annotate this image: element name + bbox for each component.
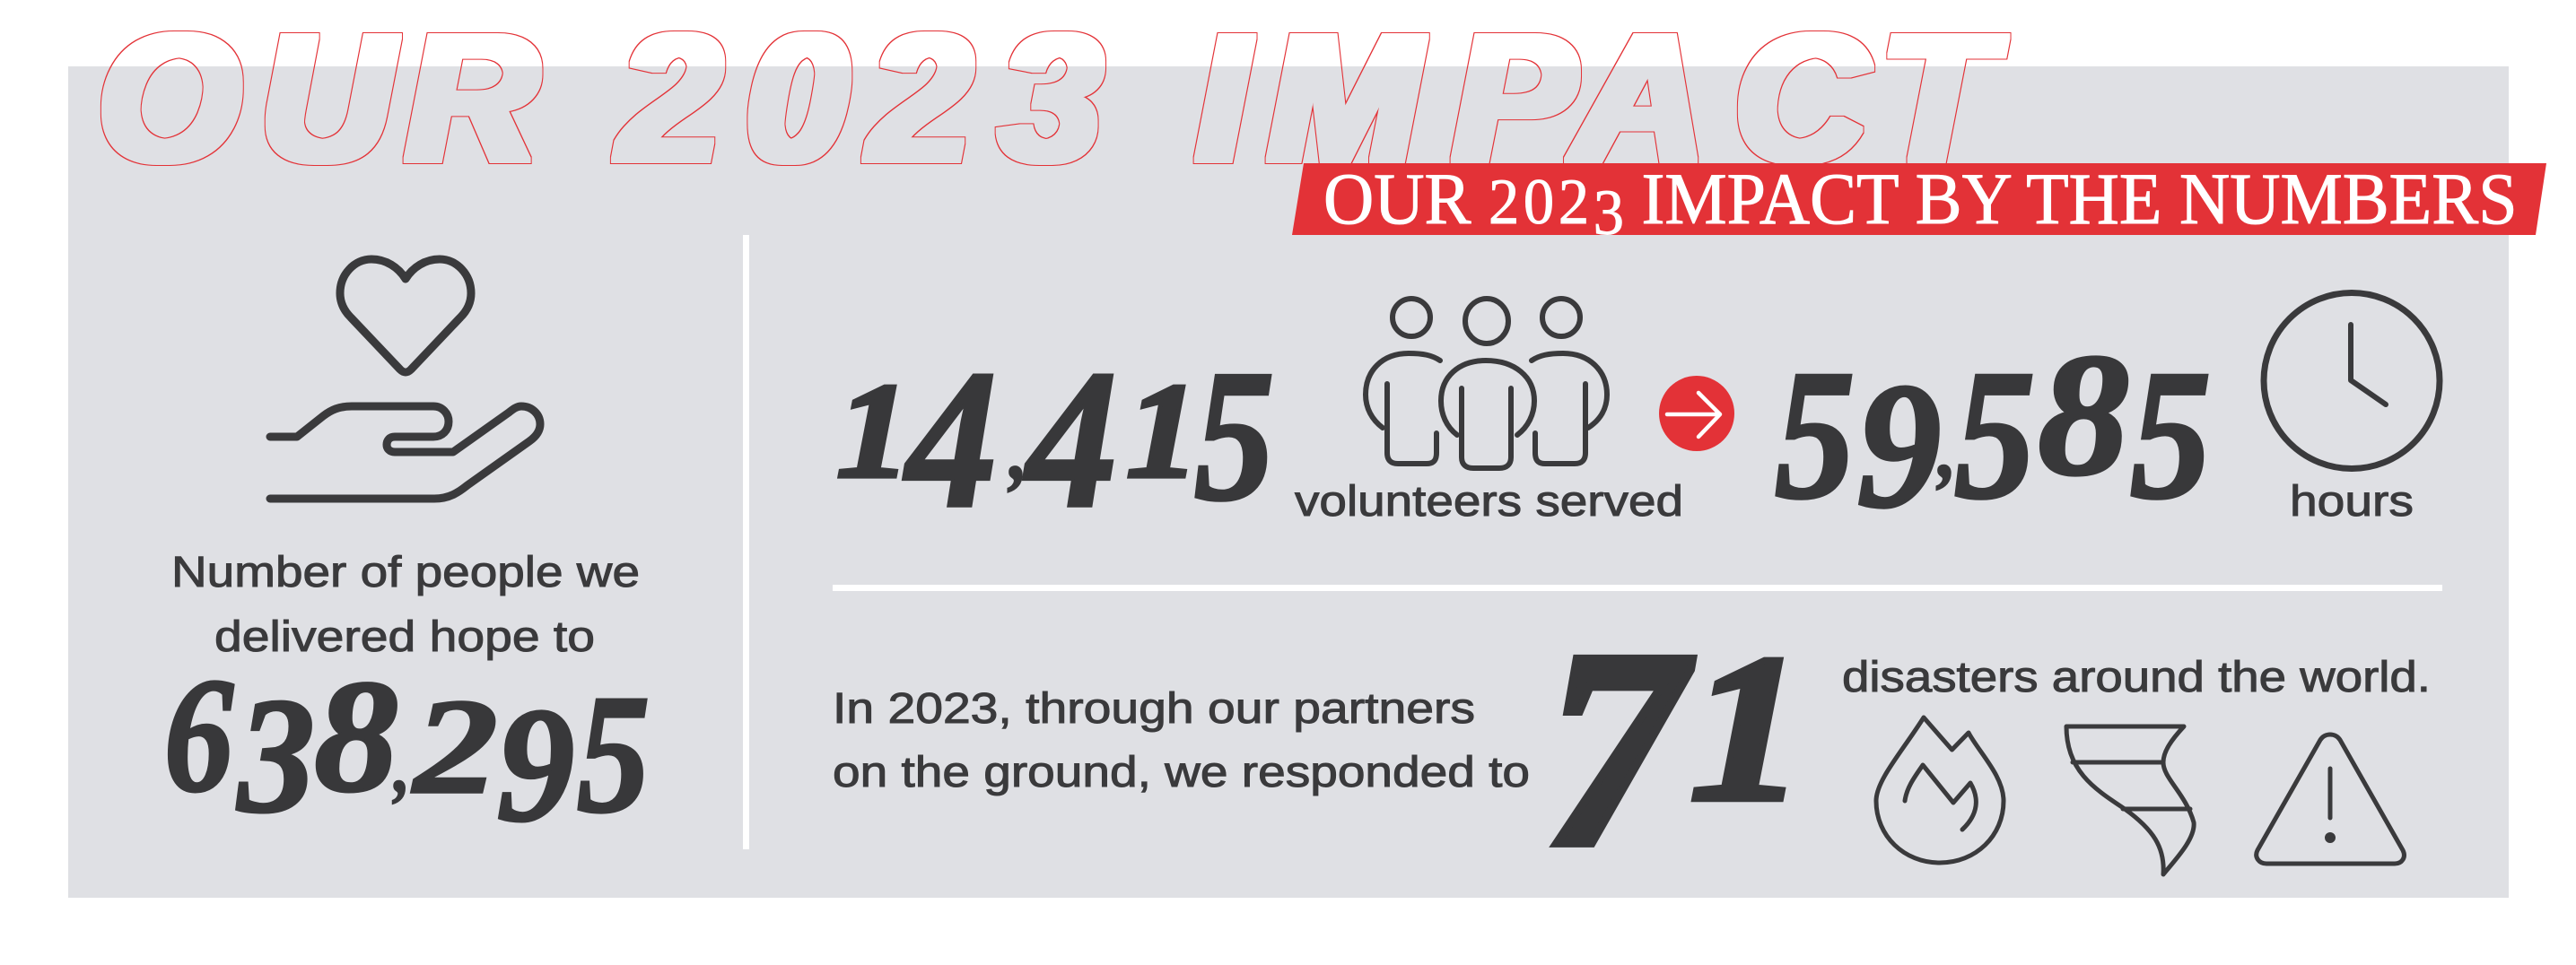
number: 59,585: 5: [2130, 333, 2211, 537]
number: 59,585: [1775, 318, 2211, 545]
banner: red subtitle ribbon: IMPACT BY THE NUMBERS: [1624, 159, 2518, 239]
title: outlined headline: OUR 2023 IMPACT: [99, 0, 2004, 199]
number: 14,415: ,: [1009, 404, 1028, 498]
number: 71: 1: [1690, 613, 1805, 845]
number: 638,295: 6: [164, 645, 234, 826]
number: 59,585: 5: [1775, 333, 1855, 537]
text: volunteers served: volunteers served: [1295, 478, 1683, 526]
number: 59,585: ,: [1938, 404, 1957, 495]
banner: red subtitle ribbon: 3: [1594, 177, 1624, 248]
text: disaster response sentence: on the ground, we responded to: [833, 749, 1530, 796]
icon part: hand: [270, 406, 540, 499]
icon: heart in open hand: [270, 259, 540, 499]
text: disaster response sentence: [833, 685, 1530, 796]
icon: fire: [1876, 717, 2004, 863]
divider: vertical rule: [743, 235, 749, 849]
number: 71: 7: [1545, 594, 1683, 905]
icon: clock: [2264, 292, 2440, 468]
icon part: heart: [340, 259, 471, 372]
banner: red subtitle ribbon: [1292, 159, 2546, 248]
icon: warning triangle: [2257, 735, 2404, 864]
number: 71: [1545, 594, 1805, 905]
number: 14,415: 5: [1194, 332, 1274, 540]
number: 14,415: 4: [1026, 330, 1117, 549]
icon: tornado: [2066, 726, 2194, 874]
text: people helped label: delivered hope to: [214, 613, 595, 661]
number: 638,295: 3: [238, 665, 315, 848]
text: people helped label: Number of people we: [171, 549, 640, 596]
number: 59,585: 9: [1857, 346, 1941, 545]
banner: red subtitle ribbon: OUR 202: [1323, 159, 1594, 239]
number: 638,295: ,: [394, 724, 411, 809]
text: hours: hours: [2290, 478, 2414, 526]
text: disasters around the world: disasters around the world.: [1842, 654, 2431, 701]
number: 14,415: 1: [836, 355, 911, 506]
number: 638,295: 5: [577, 661, 650, 848]
number: 638,295: 9: [497, 674, 574, 856]
number: 59,585: 5: [1954, 333, 2035, 537]
number: 59,585: 8: [2038, 318, 2130, 512]
number: 14,415: 1: [1126, 355, 1200, 506]
icon: three volunteers: [1366, 299, 1607, 468]
number: 14,415: 4: [906, 330, 997, 549]
icon: red arrow circle: [1659, 376, 1734, 451]
divider: horizontal rule: [833, 585, 2442, 591]
text: disaster response sentence: In 2023, through our partners: [833, 685, 1475, 733]
number: 638,295: 8: [314, 648, 398, 826]
number: 638,295: [164, 645, 650, 856]
number: 14,415: [836, 330, 1274, 549]
text: people helped label: [171, 549, 640, 661]
number: 638,295: 2: [414, 671, 498, 822]
